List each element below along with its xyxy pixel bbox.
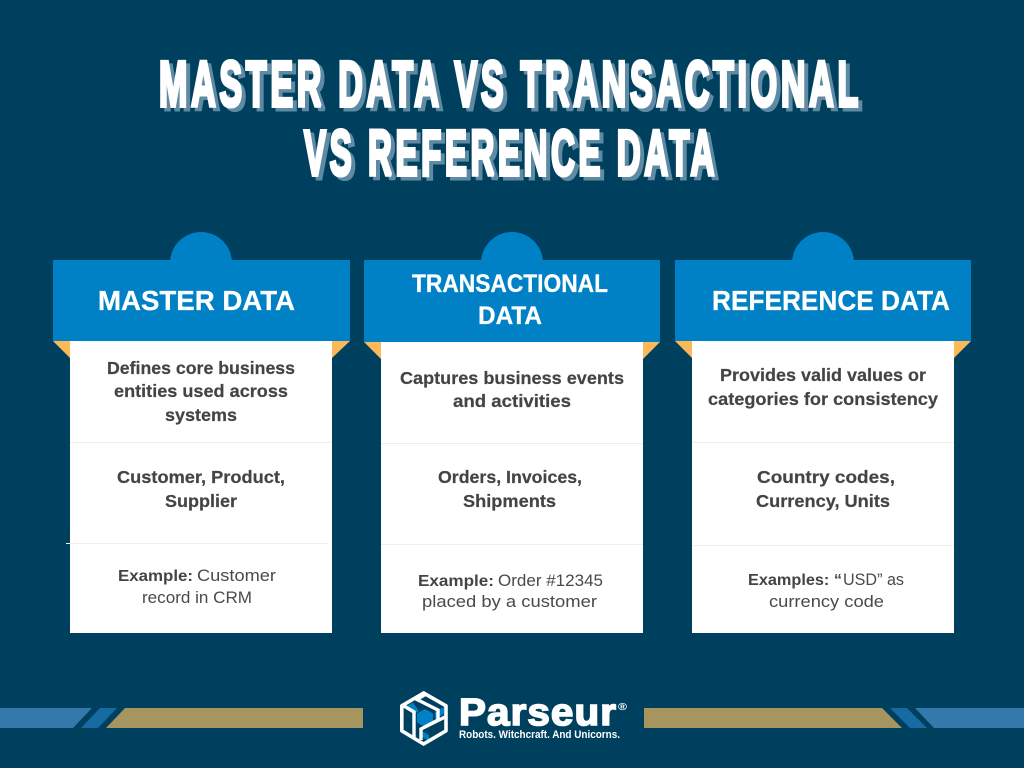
definition: reference data [708, 365, 938, 409]
example: master data: Customer [197, 567, 277, 585]
entities: reference data [756, 467, 895, 511]
definition: transactional data: Captures business events [400, 368, 624, 388]
header: master data: MASTER DATA [98, 285, 295, 316]
entities: master data [117, 467, 285, 511]
entities: transactional data [438, 467, 582, 511]
header: transactional data: DATA [478, 302, 542, 330]
definition: master data: systems [165, 405, 237, 425]
example: master data: Example: [118, 568, 193, 585]
panel: master data [53, 232, 350, 633]
definition: master data: Defines core business [107, 358, 295, 378]
panel: transactional data [364, 232, 660, 633]
example: transactional data: Order #12345 [498, 572, 603, 590]
entities: transactional data: Shipments [463, 491, 556, 511]
header: reference data: REFERENCE DATA [712, 285, 950, 316]
logo wordmark: Parseur [459, 692, 617, 734]
logo wordmark: ® [618, 702, 628, 713]
icon: parseur logo [402, 693, 446, 744]
example: transactional data [418, 572, 603, 611]
footer band: left [0, 708, 363, 728]
title [159, 48, 866, 192]
example: reference data: USD” as [843, 571, 904, 589]
entities: master data: Supplier [165, 491, 237, 511]
example: reference data [748, 571, 904, 611]
example: reference data: currency code [769, 593, 884, 611]
example: master data [118, 567, 277, 607]
entities: reference data: Currency, Units [756, 491, 890, 511]
header: transactional data [364, 232, 660, 359]
definition: reference data: Provides valid values or [720, 365, 926, 385]
logo wordmark: Robots. Witchcraft. And Unicorns. [459, 729, 620, 741]
footer band: right [644, 708, 1024, 728]
header: reference data [675, 232, 971, 358]
header: transactional data: TRANSACTIONAL [412, 270, 608, 298]
definition: master data [107, 358, 295, 425]
definition: reference data: categories for consistency [708, 389, 938, 409]
definition: transactional data [400, 368, 624, 411]
entities: transactional data: Orders, Invoices, [438, 467, 582, 487]
entities: reference data: Country codes, [757, 467, 895, 487]
definition: transactional data: and activities [453, 391, 571, 411]
header: master data [53, 232, 350, 358]
example: transactional data: placed by a customer [422, 593, 598, 611]
panel: reference data [675, 232, 971, 633]
entities: master data: Customer, Product, [117, 467, 285, 487]
definition: master data: entities used across [114, 381, 288, 401]
example: transactional data: Example: [418, 573, 494, 590]
example: reference data: Examples: “ [748, 572, 842, 589]
example: master data: record in CRM [142, 589, 252, 607]
